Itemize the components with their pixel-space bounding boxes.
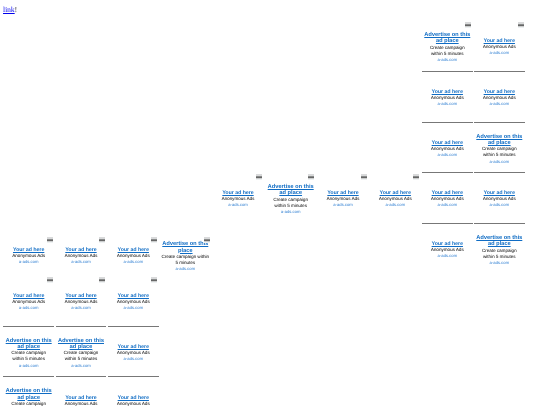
ad: your ad, left column 2 row 2: a-ads.com xyxy=(71,305,91,310)
ad: your ad, left column 3 row 3: Anonymous Ads xyxy=(117,350,150,355)
ad: your ad, left column 3 row 1: a-ads.com xyxy=(124,259,143,264)
ad: your ad, left column 3 row 3: a-ads.com xyxy=(124,356,143,361)
ad: advertise, right column 2 row 3: within 5 minutes xyxy=(483,152,516,157)
ad icon xyxy=(151,277,157,283)
ad: your ad, left column 1 row 1: a-ads.com xyxy=(19,259,38,264)
ad: advertise, left column 4 row 1: 5 minutes xyxy=(175,260,195,265)
ad: your ad, right column 1 row 4: a-ads.com xyxy=(438,202,457,207)
ad: your ad, left column 3 row 2: a-ads.com xyxy=(124,305,143,310)
ad: your ad, left column 2 row 1: Anonymous Ads xyxy=(65,253,97,258)
ad: advertise, right column 2 row 3: Advertise on this xyxy=(476,134,522,140)
ad: your ad, left column 2 row 4: Anonymous Ads xyxy=(65,401,97,406)
ad: your ad, right column 1 row 5: Your ad here xyxy=(432,241,463,247)
ad: advertise, left column 1 row 3: Create campaign xyxy=(11,350,46,355)
ad icon xyxy=(465,22,471,28)
ad: your ad, right column 2 row 4: a-ads.com xyxy=(490,202,509,207)
ad: your ad, right column 2 row 2 xyxy=(482,89,516,106)
ad: your ad, middle 4: Your ad here xyxy=(380,190,411,196)
ad: advertise, right column 1 row 1: Create campaign xyxy=(430,45,465,50)
ad: your ad, left column 1 row 1: Anonymous Ads xyxy=(12,253,45,258)
ad: advertise, right column 1 row 1: ad place xyxy=(436,38,459,44)
ad: your ad, left column 3 row 4: Your ad here xyxy=(118,395,149,401)
ad: advertise, left column 1 row 4: ad place xyxy=(17,395,40,401)
ad: your ad, right column 1 row 4 xyxy=(430,190,464,207)
ad: your ad, left column 2 row 2 xyxy=(64,293,98,310)
ad icon xyxy=(204,237,210,243)
ad: advertise, right column 2 row 3: a-ads.com xyxy=(490,159,509,164)
ad: your ad, right column 1 row 2 xyxy=(430,89,464,106)
ad: advertise, left column 2 row 3 xyxy=(58,338,104,368)
ad: your ad, left column 1 row 1: Your ad here xyxy=(13,247,44,253)
ad: your ad, right column 1 row 2: Anonymous Ads xyxy=(431,95,464,100)
ad: advertise, right column 1 row 1 xyxy=(424,32,470,62)
ad: your ad, middle 3 xyxy=(326,190,360,207)
ad: your ad, left column 3 row 1 xyxy=(116,247,150,264)
ad: your ad, middle 3: Your ad here xyxy=(327,190,359,196)
ad: advertise, left column 2 row 3: ad place xyxy=(70,344,92,350)
ad: advertise, right column 2 row 5: ad place xyxy=(488,241,511,247)
ad: your ad, right column 2 row 1: a-ads.com xyxy=(490,50,509,55)
ad: your ad, right column 2 row 4 xyxy=(482,190,516,207)
ad icon xyxy=(47,277,53,283)
ad: advertise, right column 2 row 5: Create campaign xyxy=(482,248,517,253)
ad: your ad, right column 1 row 5 xyxy=(430,241,464,258)
ad: your ad, left column 3 row 1: Your ad here xyxy=(118,247,149,253)
ad: advertise, middle 2: Create campaign xyxy=(273,197,308,202)
ad: your ad, left column 2 row 1 xyxy=(64,247,98,264)
ad: your ad, middle 1: a-ads.com xyxy=(228,202,248,207)
ad: your ad, right column 2 row 4: Your ad here xyxy=(484,190,515,196)
ad icon xyxy=(99,237,105,243)
ad: your ad, right column 2 row 2: Your ad here xyxy=(484,89,515,95)
ad: your ad, left column 3 row 4: Anonymous Ads xyxy=(117,401,150,406)
ad: your ad, right column 1 row 4: Your ad here xyxy=(432,190,463,196)
ad: your ad, left column 1 row 2: Anonymous Ads xyxy=(12,299,45,304)
ad: your ad, right column 1 row 4: Anonymous Ads xyxy=(431,196,464,201)
ad: your ad, middle 3: Anonymous Ads xyxy=(327,196,359,201)
ad: advertise, middle 2: ad place xyxy=(279,190,302,196)
ad: your ad, right column 1 row 5: Anonymous Ads xyxy=(431,247,464,252)
ad: your ad, left column 1 row 2: Your ad here xyxy=(13,293,44,299)
ad: advertise, left column 4 row 1: a-ads.com xyxy=(176,266,195,271)
ad: advertise, left column 1 row 3: ad place xyxy=(17,344,40,350)
ad: advertise, right column 2 row 3 xyxy=(476,134,522,164)
ad: your ad, right column 1 row 3: a-ads.com xyxy=(438,152,457,157)
ad: your ad, left column 3 row 4 xyxy=(116,395,150,406)
ad icon xyxy=(256,174,262,180)
ad: advertise, left column 2 row 3: a-ads.com xyxy=(71,363,91,368)
ad: advertise, left column 1 row 3: a-ads.com xyxy=(19,363,38,368)
ad: your ad, middle 4: a-ads.com xyxy=(386,202,405,207)
ad icon xyxy=(151,237,157,243)
link text: link! xyxy=(3,5,17,14)
ad: your ad, left column 2 row 4: Your ad here xyxy=(65,395,97,401)
ad: your ad, middle 4: Anonymous Ads xyxy=(379,196,412,201)
ad: your ad, left column 3 row 2 xyxy=(116,293,150,310)
ad: your ad, left column 3 row 1: Anonymous Ads xyxy=(117,253,150,258)
ad: your ad, middle 1 xyxy=(222,190,254,207)
ad: advertise, middle 2: within 5 minutes xyxy=(274,203,307,208)
ad: your ad, left column 2 row 4 xyxy=(64,395,98,406)
ad: your ad, left column 3 row 3: Your ad here xyxy=(118,344,149,350)
ad: your ad, right column 2 row 1: Anonymous Ads xyxy=(483,44,516,49)
ad: advertise, right column 2 row 5: within 5 minutes xyxy=(483,254,516,259)
ad: advertise, left column 1 row 4: Advertise on this xyxy=(6,388,52,394)
ad: your ad, right column 2 row 2: Anonymous Ads xyxy=(483,95,516,100)
ad: your ad, left column 1 row 1 xyxy=(12,247,45,264)
ad: your ad, middle 3: a-ads.com xyxy=(333,202,353,207)
ad: advertise, right column 2 row 3: Create campaign xyxy=(482,146,517,151)
ad icon xyxy=(361,174,367,180)
ad: advertise, middle 2: Advertise on this xyxy=(268,184,314,190)
ad: your ad, right column 1 row 3 xyxy=(430,140,464,157)
ad: advertise, left column 4 row 1: Create campaign within xyxy=(162,254,209,259)
ad: your ad, right column 2 row 1: Your ad here xyxy=(484,38,515,44)
ad: advertise, left column 4 row 1: Advertise on this xyxy=(162,241,208,247)
ad: your ad, right column 1 row 2: a-ads.com xyxy=(438,101,457,106)
ad: advertise, right column 2 row 5 xyxy=(476,234,522,265)
ad: your ad, left column 3 row 2: Anonymous Ads xyxy=(117,299,150,304)
ad: your ad, right column 1 row 2: Your ad here xyxy=(432,89,463,95)
ad: your ad, left column 1 row 2: a-ads.com xyxy=(19,305,38,310)
ad: advertise, middle 2 xyxy=(268,184,314,214)
ad: advertise, left column 2 row 3: within 5 minutes xyxy=(65,356,97,361)
ad: advertise, left column 1 row 4 xyxy=(6,388,52,406)
ad: your ad, right column 1 row 3: Your ad here xyxy=(432,140,463,146)
ad: your ad, left column 2 row 1: Your ad here xyxy=(65,247,97,253)
ad: advertise, left column 1 row 4: Create campaign xyxy=(11,401,46,406)
ad: your ad, right column 2 row 4: Anonymous Ads xyxy=(483,196,516,201)
ad: your ad, middle 1: Anonymous Ads xyxy=(222,196,254,201)
ad icon xyxy=(47,237,53,243)
ad: advertise, right column 2 row 5: Advertise on this xyxy=(476,235,522,241)
ad icon xyxy=(99,277,105,283)
ad icon xyxy=(518,22,524,28)
ad: your ad, right column 2 row 2: a-ads.com xyxy=(490,101,509,106)
ad: your ad, left column 3 row 2: Your ad here xyxy=(118,293,149,299)
ad: advertise, right column 1 row 1: a-ads.com xyxy=(438,57,457,62)
ad: advertise, left column 4 row 1: place xyxy=(178,248,193,254)
ad: advertise, right column 2 row 3: ad place xyxy=(488,140,511,146)
ad: advertise, left column 4 row 1 xyxy=(162,240,209,271)
ad: advertise, left column 1 row 3: within 5 minutes xyxy=(12,356,45,361)
ad: your ad, left column 2 row 1: a-ads.com xyxy=(71,259,91,264)
ad: your ad, left column 3 row 3 xyxy=(116,344,150,361)
ad: your ad, left column 2 row 2: Your ad here xyxy=(65,293,97,299)
ad icon xyxy=(308,174,314,180)
ad: advertise, middle 2: a-ads.com xyxy=(281,209,300,214)
ad: advertise, right column 2 row 5: a-ads.com xyxy=(490,260,509,265)
ad: your ad, middle 4 xyxy=(378,190,412,207)
ad: advertise, left column 2 row 3: Create campaign xyxy=(64,350,98,355)
ad: advertise, right column 1 row 1: Advertise on this xyxy=(424,32,470,38)
ad icon xyxy=(413,174,419,180)
ad: your ad, left column 2 row 2: Anonymous Ads xyxy=(65,299,97,304)
ad: your ad, left column 1 row 2 xyxy=(12,293,45,310)
ad: advertise, left column 1 row 3 xyxy=(6,338,52,368)
ad: advertise, left column 1 row 3: Advertise on this xyxy=(6,338,52,344)
ad: your ad, right column 2 row 1 xyxy=(482,38,516,55)
ad: advertise, right column 1 row 1: within 5 minutes xyxy=(431,51,464,56)
ad: your ad, right column 1 row 3: Anonymous Ads xyxy=(431,146,464,151)
ad: advertise, left column 2 row 3: Advertise on this xyxy=(58,338,104,344)
ad: your ad, middle 1: Your ad here xyxy=(222,190,254,196)
ad: your ad, right column 1 row 5: a-ads.com xyxy=(438,253,457,258)
